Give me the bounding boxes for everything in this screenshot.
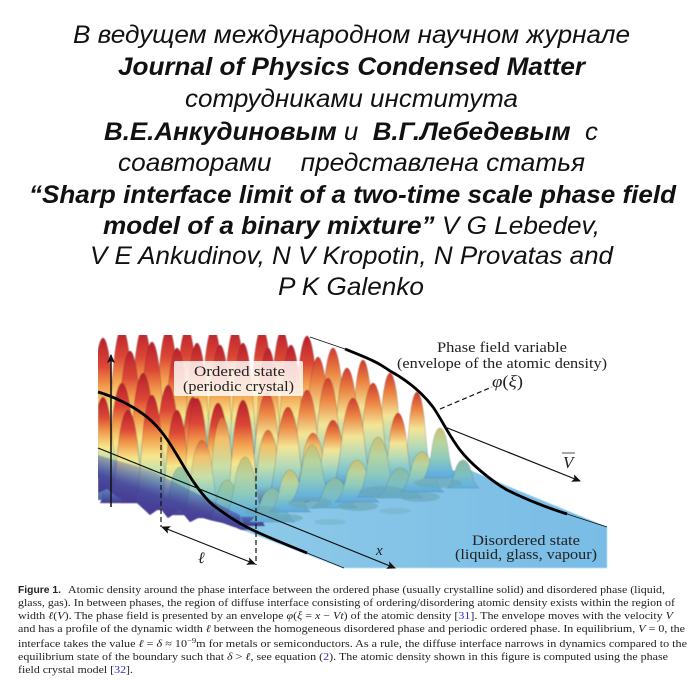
front envelope curve	[98, 392, 307, 553]
figure caption: and has a profile of the dynamic width ℓ between the homogeneous disordered phase and periodic ordered phase. In equilibrium, V = 0, the	[18, 624, 685, 635]
back envelope curve	[345, 349, 567, 514]
density axis arrow	[110, 355, 112, 507]
label: ordered state: (periodic crystal)	[183, 379, 294, 395]
low teal bumps near the interface	[160, 428, 479, 530]
figure caption: glass, gas). In between phases, the region of diffuse interface consisting of ordering/disordering atomic density exists within the region of	[18, 598, 676, 609]
back row of peaks	[98, 335, 429, 478]
title: publication announcement: Journal of Physics Condensed Matter	[118, 53, 586, 81]
title: publication announcement: “Sharp interface limit of a two-time scale phase field	[29, 181, 677, 209]
figure caption: field crystal model [ 32].	[18, 665, 133, 676]
dashed width markers	[161, 437, 256, 565]
front row of tall peaks	[84, 395, 375, 527]
chart: periodic crystal density peaks and liquid plane	[83, 328, 607, 568]
label: disordered state	[455, 533, 597, 563]
title: publication announcement: P K Galenko	[278, 273, 424, 301]
label: phase field variable: Phase field variable	[437, 340, 567, 356]
figure caption: −9	[187, 636, 196, 645]
figure caption: m for metals or semiconductors. As a rule, the diffuse interface narrows in dynamics compared to the	[196, 639, 687, 650]
figure caption: Figure 1.	[18, 585, 61, 596]
label: phase field variable	[397, 340, 607, 391]
title: publication announcement: model of a binary mixture” V G Lebedev,	[103, 212, 600, 240]
surface ripples	[245, 478, 462, 525]
label: disordered state: (liquid, glass, vapour)	[455, 547, 597, 563]
disordered liquid plane	[237, 470, 607, 568]
x axis arrow	[98, 448, 395, 568]
figure caption: interface takes the value ℓ = δ ≈ 10	[18, 639, 184, 650]
purple shadow band at the crystal base	[98, 455, 240, 535]
velocity arrow	[445, 427, 580, 481]
figure caption	[18, 585, 687, 676]
figure: atomic density surface	[83, 328, 607, 568]
title: publication announcement: В ведущем международном научном журнале	[73, 21, 630, 49]
label: interface width: ℓ	[198, 550, 205, 567]
figure caption: Atomic density around the phase interface between the ordered phase (usually crystalline solid) and disordered phase (liquid,	[68, 585, 665, 596]
label: x axis: x	[375, 543, 383, 559]
label: disordered state: Disordered state	[472, 533, 580, 549]
title: publication announcement	[29, 21, 677, 301]
label: ordered state: Ordered state	[194, 364, 285, 380]
dashed leader to phase field curve	[440, 387, 492, 409]
title: publication announcement: сотрудниками института	[185, 85, 518, 113]
third row of peaks	[100, 373, 416, 518]
title: publication announcement: соавторами представлена статья	[118, 149, 585, 177]
label: velocity vector: V	[563, 453, 576, 472]
label: ordered state	[174, 361, 303, 396]
title: publication announcement: V E Ankudinov, N V Kropotin, N Provatas and	[90, 242, 614, 270]
figure caption: equilibrium state of the boundary such that δ > ℓ, see equation ( 2). The atomic density shown in this figure is computed using the phase	[18, 652, 668, 663]
figure caption: width ℓ(V). The phase field is presented by an envelope φ(ξ = x − Vt) of the atomic density [ 31]. The envelope moves with the velocity V	[18, 611, 675, 622]
title: publication announcement: В.Е.Анкудиновым и В.Г.Лебедевым с	[104, 118, 599, 146]
width double arrow	[162, 527, 255, 564]
front rows clipped to wavy base	[84, 395, 479, 535]
thin envelope extensions	[307, 337, 607, 568]
backing fill between peaks	[98, 392, 430, 500]
second row of peaks	[121, 341, 386, 459]
label: phase field variable: (envelope of the atomic density)	[397, 356, 607, 372]
label: phase field variable: φ(ξ)	[492, 372, 523, 391]
